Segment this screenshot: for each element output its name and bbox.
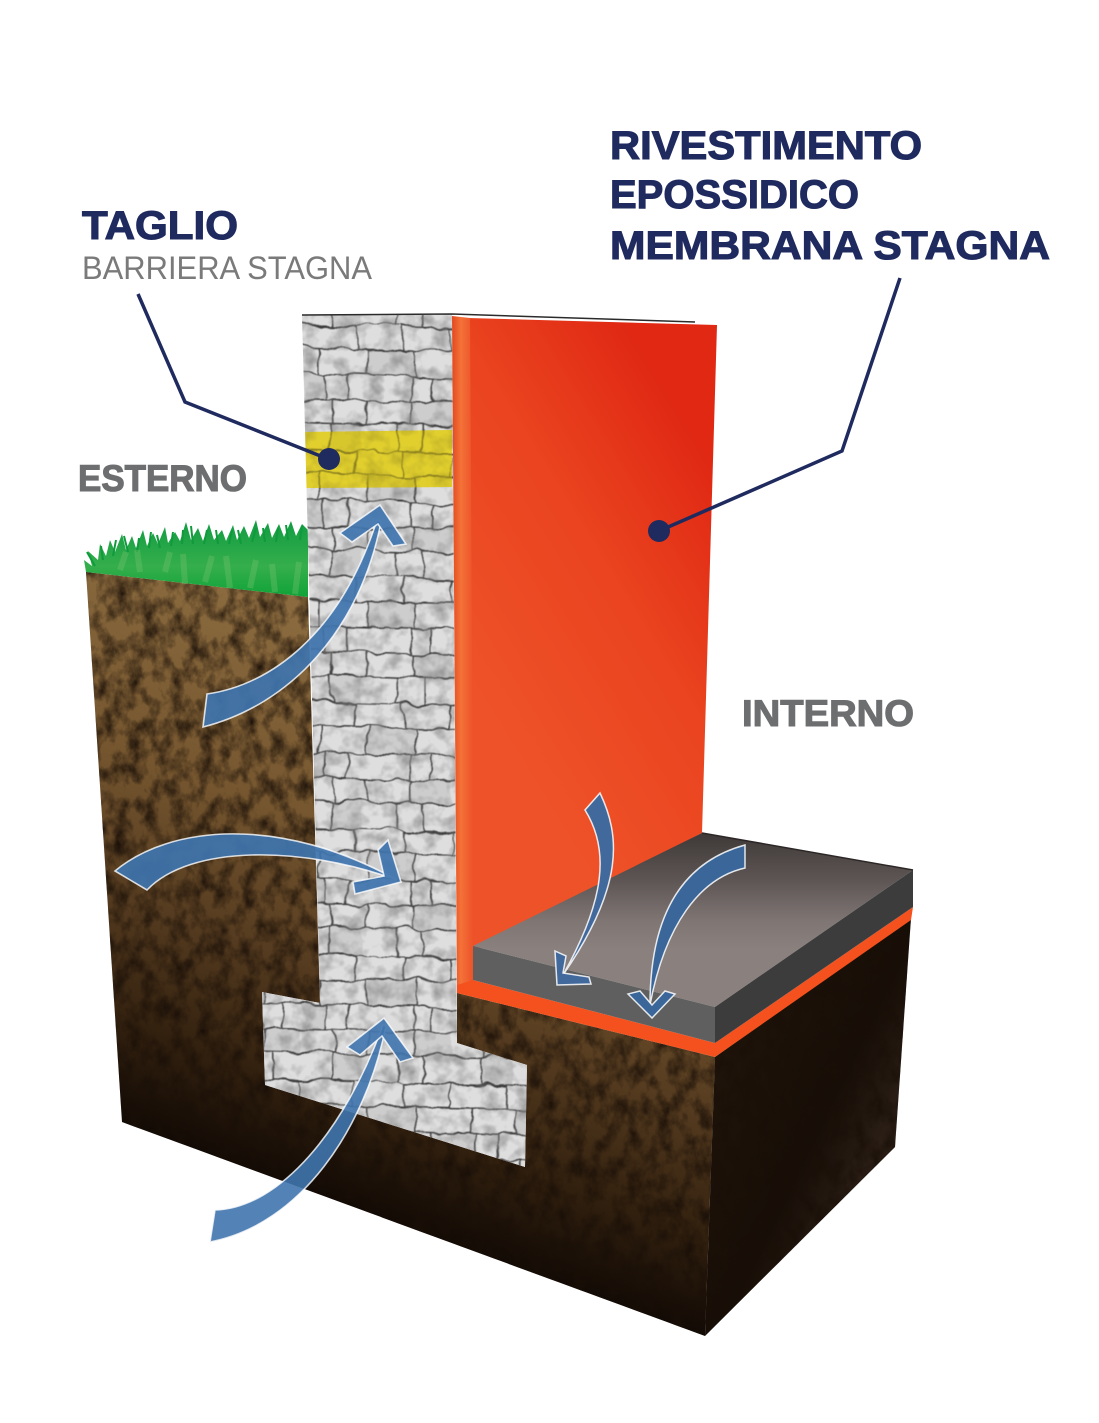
leader line: rivestimento — [648, 278, 900, 542]
heading: taglio: TAGLIO — [82, 204, 238, 248]
heading: taglio — [82, 204, 373, 286]
concrete floor slab — [473, 833, 913, 1043]
grass — [84, 520, 308, 597]
leader line: taglio — [138, 294, 340, 470]
label: esterno: ESTERNO — [78, 458, 247, 499]
soil block: front face — [86, 572, 715, 1336]
heading: taglio: BARRIERA STAGNA — [82, 250, 373, 286]
arrow: moisture down to slab, left — [555, 793, 613, 985]
heading: rivestimento epossidico: MEMBRANA STAGNA — [610, 224, 1050, 268]
orange membrane under the floor — [457, 907, 913, 1057]
heading: rivestimento epossidico: EPOSSIDICO — [610, 173, 859, 217]
red epoxy membrane on wall — [452, 316, 717, 993]
arrow: moisture rising through footing — [210, 1018, 413, 1242]
arrow: moisture down to slab, right — [628, 845, 745, 1018]
wall top edge line — [302, 314, 695, 322]
soil block: right face — [705, 918, 911, 1336]
arrow: lateral moisture — [115, 834, 401, 894]
heading: rivestimento epossidico — [610, 124, 1050, 268]
heading: rivestimento epossidico: RIVESTIMENTO — [610, 124, 922, 168]
infographic: wall cross-section — [80, 130, 1050, 1336]
arrow: moisture rising to barrier — [203, 505, 406, 727]
label: interno: INTERNO — [742, 693, 914, 734]
stone wall with footing — [262, 315, 527, 1167]
yellow cut barrier band — [305, 430, 452, 488]
